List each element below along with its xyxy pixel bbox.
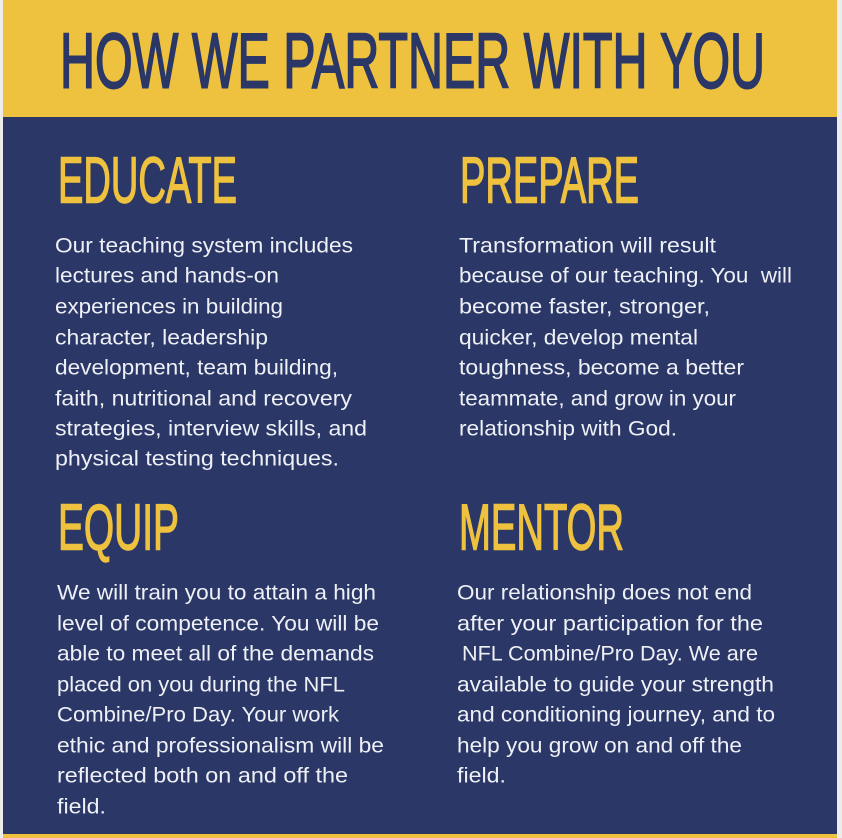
text block: educate: faith, nutritional and recovery <box>55 386 352 410</box>
text block: educate: physical testing techniques. <box>55 446 339 470</box>
heading: equip: EQUIP <box>58 490 179 564</box>
panel: prepare <box>459 144 792 440</box>
heading: educate: EDUCATE <box>58 144 237 216</box>
text block: equip: level of competence. You will be <box>57 612 379 636</box>
text block: prepare: because of our teaching. You will <box>459 264 792 288</box>
text block: prepare: relationship with God. <box>459 416 677 440</box>
text block: mentor <box>457 580 775 788</box>
text block: mentor: NFL Combine/Pro Day. We are <box>462 642 758 666</box>
text block: equip: reflected both on and off the <box>57 764 348 788</box>
text block: prepare: become faster, stronger, <box>459 294 710 318</box>
text block: equip <box>57 580 384 818</box>
heading: prepare: PREPARE <box>460 144 639 216</box>
panel: mentor <box>457 490 775 788</box>
bottom yellow strip <box>3 834 837 838</box>
text block: mentor: help you grow on and off the <box>457 734 742 758</box>
text block: educate: development, team building, <box>55 356 338 380</box>
text block: prepare: Transformation will result <box>459 234 716 258</box>
panel: educate <box>55 144 367 470</box>
text block: equip: able to meet all of the demands <box>57 642 374 666</box>
text block: prepare: quicker, develop mental <box>459 326 698 350</box>
text block: equip: Combine/Pro Day. Your work <box>57 702 339 726</box>
text block: prepare: teammate, and grow in your <box>459 386 736 410</box>
top yellow banner <box>3 0 837 117</box>
panel: equip <box>57 490 384 818</box>
text block: mentor: available to guide your strength <box>457 672 774 696</box>
text block: educate: lectures and hands-on <box>55 264 279 288</box>
text block: equip: We will train you to attain a high <box>57 580 376 604</box>
text block: prepare: toughness, become a better <box>459 356 744 380</box>
text block: prepare <box>459 234 792 440</box>
text block: mentor: field. <box>457 764 506 788</box>
text block: educate: experiences in building <box>55 294 283 318</box>
text block: mentor: after your participation for the <box>457 612 763 636</box>
text block: educate: character, leadership <box>55 326 268 350</box>
text block: educate: Our teaching system includes <box>55 234 353 258</box>
heading: mentor: MENTOR <box>459 490 624 564</box>
text block: educate: strategies, interview skills, and <box>55 416 367 440</box>
text block: equip: field. <box>57 794 106 818</box>
text block: educate <box>55 234 367 470</box>
text block: mentor: Our relationship does not end <box>457 580 752 604</box>
text block: equip: ethic and professionalism will be <box>57 734 384 758</box>
text block: equip: placed on you during the NFL <box>57 672 345 696</box>
text block: mentor: and conditioning journey, and to <box>457 702 775 726</box>
